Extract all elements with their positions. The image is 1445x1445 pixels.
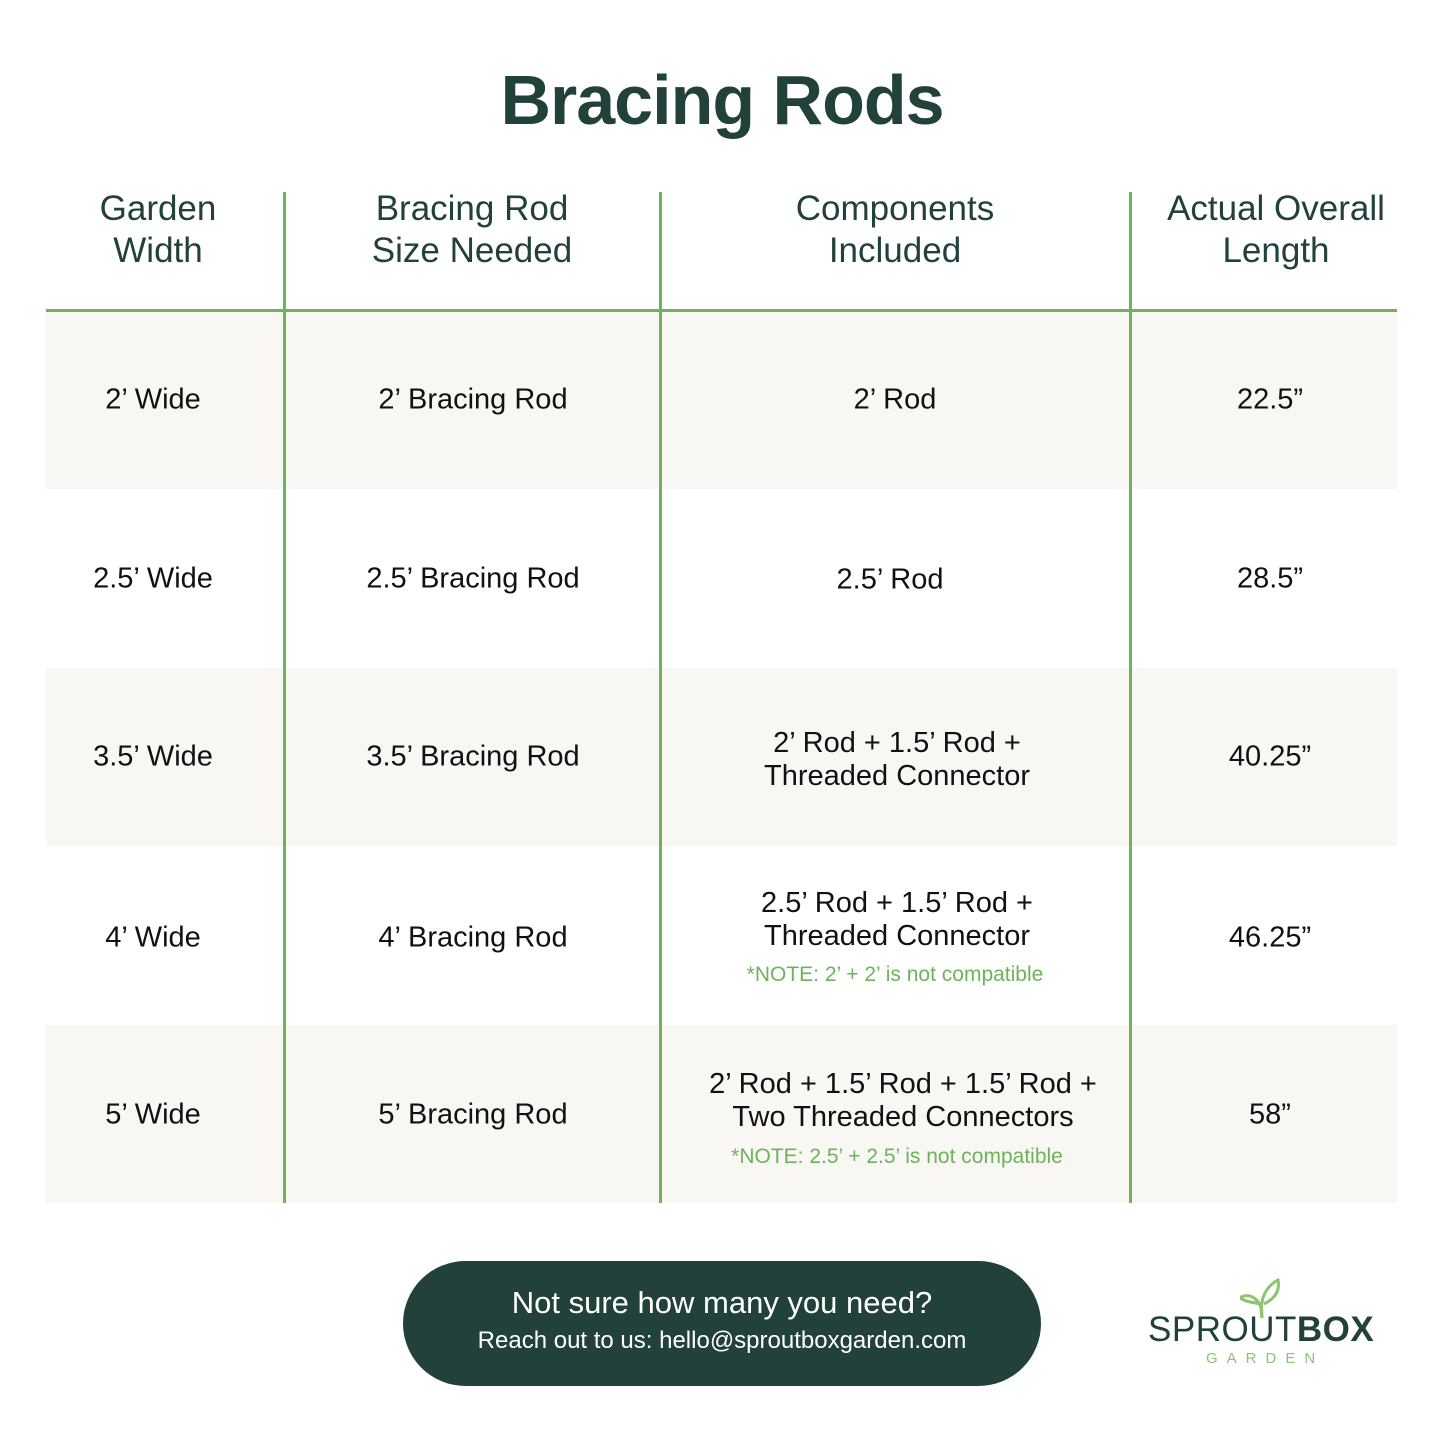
table [46, 312, 1397, 1203]
text: 40.25” [1229, 740, 1311, 772]
header: garden width [100, 189, 216, 270]
callout pill [403, 1261, 1041, 1386]
logo: SPROUTBOX [1148, 1310, 1374, 1349]
row 5: 5’ Wide [105, 1098, 201, 1130]
text: 2’ Rod + 1.5’ Rod + [773, 727, 1021, 759]
text: Two Threaded Connectors [732, 1101, 1074, 1133]
text: 2’ Rod + 1.5’ Rod + 1.5’ Rod + [709, 1068, 1097, 1100]
row 3: 3.5’ Wide [93, 740, 213, 772]
header: length [1167, 189, 1385, 270]
row 2: 2.5’ Wide [93, 562, 213, 594]
text: 2.5’ Rod [837, 564, 943, 596]
text: Threaded Connector [764, 760, 1030, 792]
row 1: 2’ Wide [105, 384, 201, 416]
header: garden width: Width [113, 231, 203, 270]
icon: sprout [1240, 1278, 1280, 1318]
header: rod size: Size Needed [372, 231, 572, 270]
callout pill: Reach out to us: hello@sproutboxgarden.com [478, 1327, 966, 1354]
note 4: *NOTE: 2’ + 2’ is not compatible [747, 963, 1043, 986]
text: 2.5’ Bracing Rod [366, 562, 580, 594]
text: 28.5” [1237, 562, 1303, 594]
callout pill: Not sure how many you need? [512, 1285, 932, 1320]
text: 2.5’ Rod + 1.5’ Rod + [761, 887, 1033, 919]
text: 58” [1249, 1098, 1291, 1130]
text: Threaded Connector [764, 920, 1030, 952]
header: components: Included [829, 231, 961, 270]
logo [1148, 1278, 1374, 1367]
text: 22.5” [1237, 384, 1303, 416]
note 5: *NOTE: 2.5’ + 2.5’ is not compatible [731, 1145, 1063, 1168]
text: 2’ Bracing Rod [378, 384, 568, 416]
header: components: Components [796, 189, 994, 228]
header: rod size: Bracing Rod [376, 189, 568, 228]
header: rod size [372, 189, 572, 270]
title: Bracing Rods [500, 61, 944, 139]
text: 2’ Rod [854, 384, 936, 416]
header: garden width: Garden [100, 189, 216, 228]
header: length: Length [1222, 231, 1330, 270]
header: length: Actual Overall [1167, 189, 1385, 228]
header: components [796, 189, 994, 270]
text: 4’ Bracing Rod [378, 922, 568, 954]
row 4: 4’ Wide [105, 922, 201, 954]
text: 5’ Bracing Rod [378, 1098, 568, 1130]
text: 46.25” [1229, 922, 1311, 954]
logo: GARDEN [1206, 1350, 1324, 1367]
text: 3.5’ Bracing Rod [366, 740, 580, 772]
